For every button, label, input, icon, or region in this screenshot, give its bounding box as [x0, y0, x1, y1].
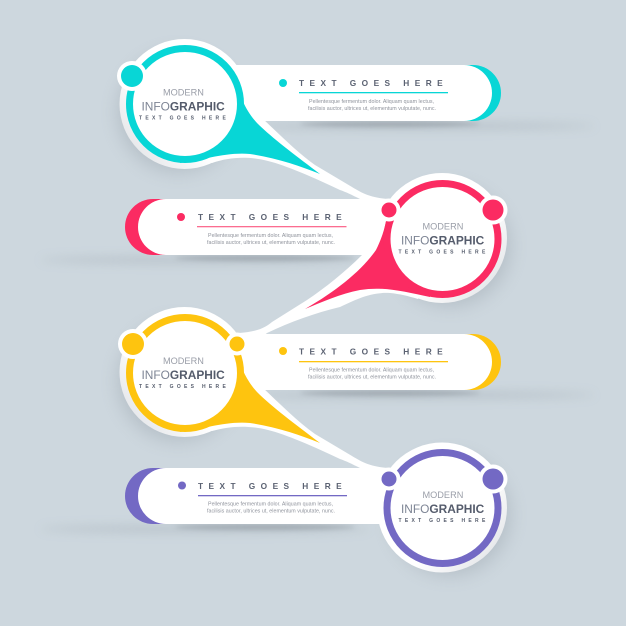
unit 3 yellow badge — [118, 318, 320, 443]
heading: TEXT GOES HERE — [299, 78, 448, 88]
badge text 1 — [139, 88, 229, 122]
body text: Pellentesque fermentum dolor. Aliquam quam lectus, — [208, 233, 333, 239]
heading: TEXT GOES HERE — [299, 346, 448, 356]
white disc 3 — [120, 307, 250, 437]
crescent teal — [440, 65, 501, 121]
white connector tail 2 — [228, 215, 445, 365]
red ring — [387, 184, 498, 294]
badge text 4: MODERN — [422, 490, 463, 500]
bullet — [279, 347, 287, 355]
halo large — [478, 196, 508, 224]
body text: Pellentesque fermentum dolor. Aliquam quam lectus, — [309, 99, 434, 105]
yellow dot small — [230, 336, 244, 352]
halo large — [478, 464, 508, 494]
bar text 4 — [178, 481, 347, 514]
badge text 1: TEXT GOES HERE — [139, 116, 229, 122]
badge text 3: TEXT GOES HERE — [139, 384, 229, 390]
bullet — [279, 79, 287, 87]
purple dot large — [482, 468, 504, 490]
unit 1 teal badge — [117, 48, 320, 174]
badge text 1: INFOGRAPHIC — [142, 100, 225, 114]
white disc 4 — [377, 442, 507, 572]
red tail — [305, 221, 450, 309]
teal ring — [130, 48, 240, 160]
heading: TEXT GOES HERE — [198, 481, 347, 491]
badge text 2 — [398, 222, 489, 256]
halo small — [226, 332, 248, 356]
yellow dot large — [122, 333, 144, 355]
bullet — [178, 482, 186, 490]
bar text 1 — [279, 78, 448, 112]
bar and circle shadows — [40, 52, 595, 575]
bar text 2: facilisis auctor, ultrices ut, elementum vulputate, nunc. — [207, 240, 335, 246]
badge text 2: MODERN — [422, 222, 463, 232]
bar text 2 — [177, 212, 347, 246]
bar text 3 — [279, 346, 448, 380]
panel: bar 2 red — [125, 199, 395, 255]
panel: bar 1 teal — [235, 65, 501, 121]
teal tail — [180, 85, 320, 174]
badge text 4: INFOGRAPHIC — [401, 502, 485, 516]
bullet — [177, 213, 185, 221]
halo large — [118, 329, 148, 359]
halo small — [378, 468, 400, 490]
badge text 3 — [139, 356, 229, 390]
red dot large — [482, 200, 504, 220]
crescent purple — [125, 468, 180, 524]
teal dot — [121, 65, 143, 87]
red dot small — [382, 202, 396, 218]
purple ring — [387, 452, 498, 564]
unit 2 red badge — [305, 184, 508, 309]
white connector tail 3 — [185, 334, 400, 499]
badge text 4: TEXT GOES HERE — [398, 518, 489, 524]
panel: bar 3 yellow — [235, 334, 501, 390]
heading: TEXT GOES HERE — [198, 212, 347, 222]
halo — [117, 61, 147, 91]
badge text 2: TEXT GOES HERE — [398, 250, 489, 256]
body text: Pellentesque fermentum dolor. Aliquam quam lectus, — [309, 368, 434, 374]
halo small — [378, 198, 400, 222]
crescent red — [125, 199, 180, 255]
bar text 4: facilisis auctor, ultrices ut, elementum vulputate, nunc. — [207, 508, 335, 514]
yellow tail — [180, 354, 320, 443]
badge text 3: INFOGRAPHIC — [142, 368, 225, 382]
badge text 3: MODERN — [163, 356, 204, 366]
white disc 1 — [120, 39, 250, 169]
body text: Pellentesque fermentum dolor. Aliquam quam lectus, — [208, 502, 333, 508]
white disc 2 — [377, 173, 507, 303]
panel: bar 4 purple — [125, 468, 395, 524]
unit 4 purple badge — [378, 452, 508, 564]
white connector tail 1 — [185, 65, 400, 230]
purple dot small — [382, 472, 396, 486]
badge text 1: MODERN — [163, 88, 204, 98]
badge text 4 — [398, 490, 489, 524]
bar text 3: facilisis auctor, ultrices ut, elementum vulputate, nunc. — [308, 374, 436, 380]
badge text 2: INFOGRAPHIC — [401, 234, 485, 248]
bar text 1: facilisis auctor, ultrices ut, elementum vulputate, nunc. — [308, 106, 436, 112]
crescent yellow — [440, 334, 501, 390]
yellow ring — [130, 318, 240, 428]
